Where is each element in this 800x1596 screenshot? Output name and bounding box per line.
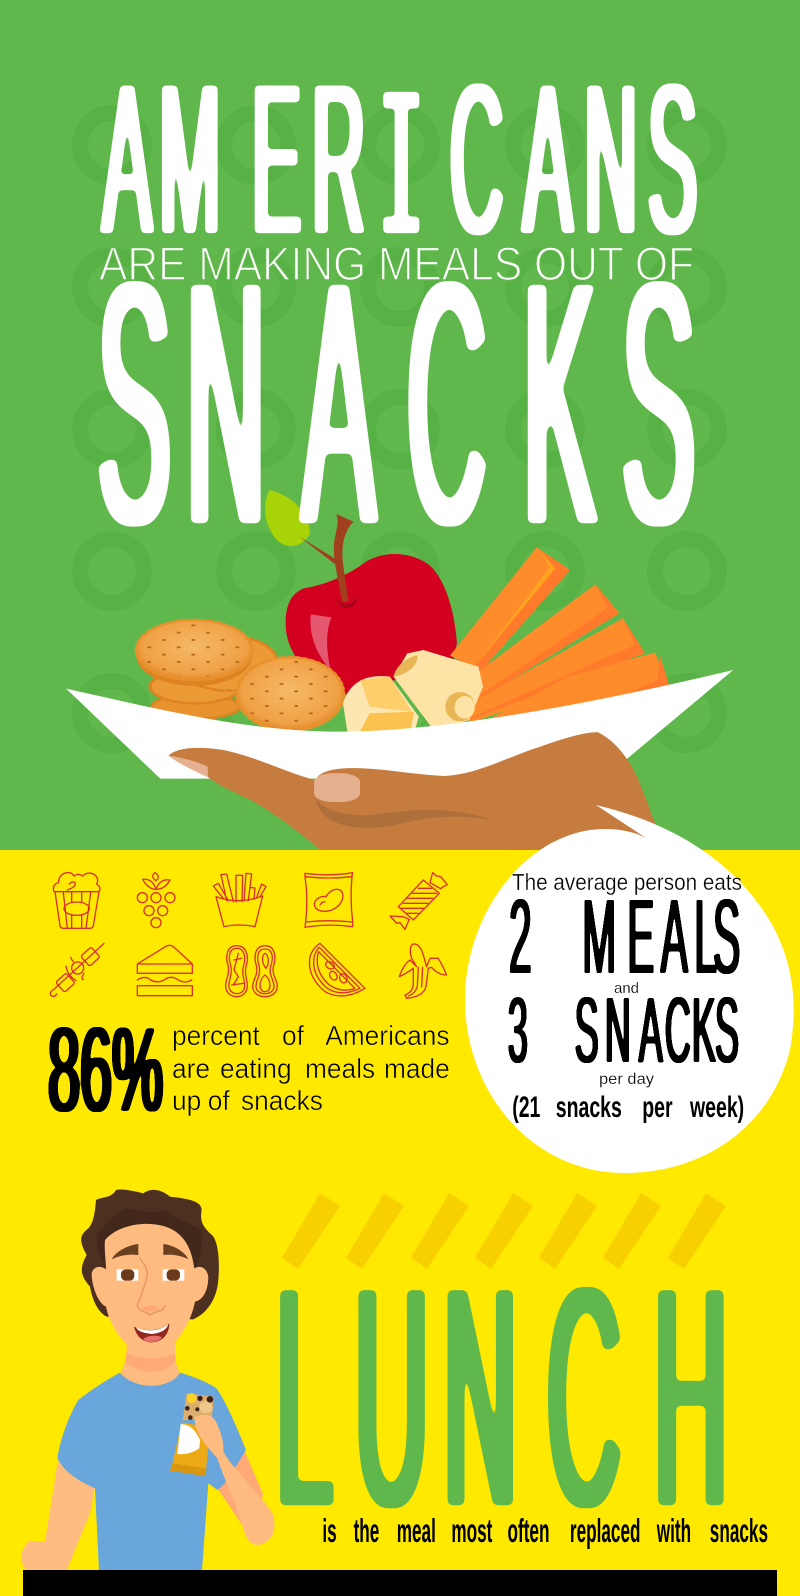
shirt — [57, 1373, 246, 1571]
hair — [81, 1190, 219, 1319]
paragraph — [172, 1019, 450, 1116]
paragraph: up — [172, 1084, 201, 1116]
eyes — [117, 1269, 184, 1281]
smile — [134, 1323, 169, 1342]
snack bar — [170, 1393, 214, 1476]
caption under Lunch: replaced — [570, 1512, 640, 1550]
left arm — [21, 1462, 95, 1571]
bubble text: The average person eats — [512, 869, 742, 895]
decorative slanted stripes — [282, 1193, 726, 1269]
bubble text: 2 MEALS — [509, 878, 740, 997]
icon: chip bag — [305, 873, 353, 927]
caption under Lunch: meal — [397, 1512, 436, 1550]
bubble text — [508, 869, 744, 1124]
apple — [286, 514, 457, 697]
bubble text: (21 — [512, 1091, 540, 1124]
paragraph: are — [172, 1052, 210, 1084]
background ring pattern — [80, 113, 719, 745]
caption under Lunch: with — [656, 1512, 691, 1550]
subheading: ARE MAKING MEALS OUT OF — [99, 237, 694, 290]
paragraph: of — [208, 1084, 230, 1116]
heading: Snacks: SNACKS — [98, 212, 695, 597]
heading: Lunch: LUNCH — [276, 1224, 728, 1572]
bubble text: per — [642, 1091, 673, 1124]
bubble text: week) — [689, 1091, 744, 1124]
paragraph: percent — [172, 1019, 260, 1051]
white plate — [66, 670, 733, 779]
bubble text: and — [614, 980, 639, 997]
caption under Lunch: the — [354, 1512, 379, 1550]
neck — [121, 1343, 180, 1386]
icon: peanuts — [226, 946, 277, 997]
eyebrows — [112, 1244, 188, 1259]
caption under Lunch: often — [508, 1512, 549, 1550]
face — [92, 1224, 208, 1355]
bubble text: per day — [599, 1071, 654, 1088]
bubble text: 3 SNACKS — [508, 978, 739, 1082]
black footer bar — [23, 1570, 777, 1596]
green background panel — [0, 0, 800, 850]
caption under Lunch: most — [451, 1512, 493, 1550]
icon: banana — [399, 944, 447, 998]
icon: candy — [390, 873, 447, 929]
caption under Lunch: snacks — [710, 1512, 768, 1550]
illustration: plate of snacks held by a hand — [66, 490, 733, 850]
snack icons grid — [50, 873, 447, 998]
icon: french fries — [213, 873, 266, 927]
nose — [137, 1257, 165, 1315]
crackers — [136, 620, 343, 731]
stat: 86 percent — [48, 1003, 450, 1136]
icon: melon slice — [309, 943, 365, 996]
paragraph: snacks — [241, 1084, 323, 1116]
apple leaf — [265, 490, 310, 546]
illustration: man holding a snack bar — [21, 1190, 274, 1571]
yellow panel — [0, 850, 800, 1596]
paragraph: meals — [305, 1052, 375, 1084]
speech bubble — [465, 805, 794, 1173]
paragraph: made — [384, 1052, 450, 1084]
bubble text: snacks — [556, 1091, 622, 1124]
right forearm and hand — [195, 1415, 274, 1545]
paragraph: eating — [220, 1052, 292, 1084]
icon: sandwich — [137, 945, 192, 996]
icon: skewer — [50, 943, 104, 996]
back of right arm — [217, 1452, 263, 1527]
icon: popcorn — [53, 873, 100, 928]
big number: 86% — [48, 1003, 163, 1136]
cheese — [343, 650, 483, 733]
carrot sticks — [450, 547, 673, 730]
title — [98, 39, 697, 597]
icon: grapes — [137, 873, 175, 928]
hand — [169, 732, 660, 850]
paragraph: Americans — [325, 1019, 449, 1051]
heading: Americans: AMERICANS — [102, 39, 697, 299]
caption under Lunch: is — [322, 1512, 337, 1550]
paragraph: of — [282, 1019, 304, 1051]
